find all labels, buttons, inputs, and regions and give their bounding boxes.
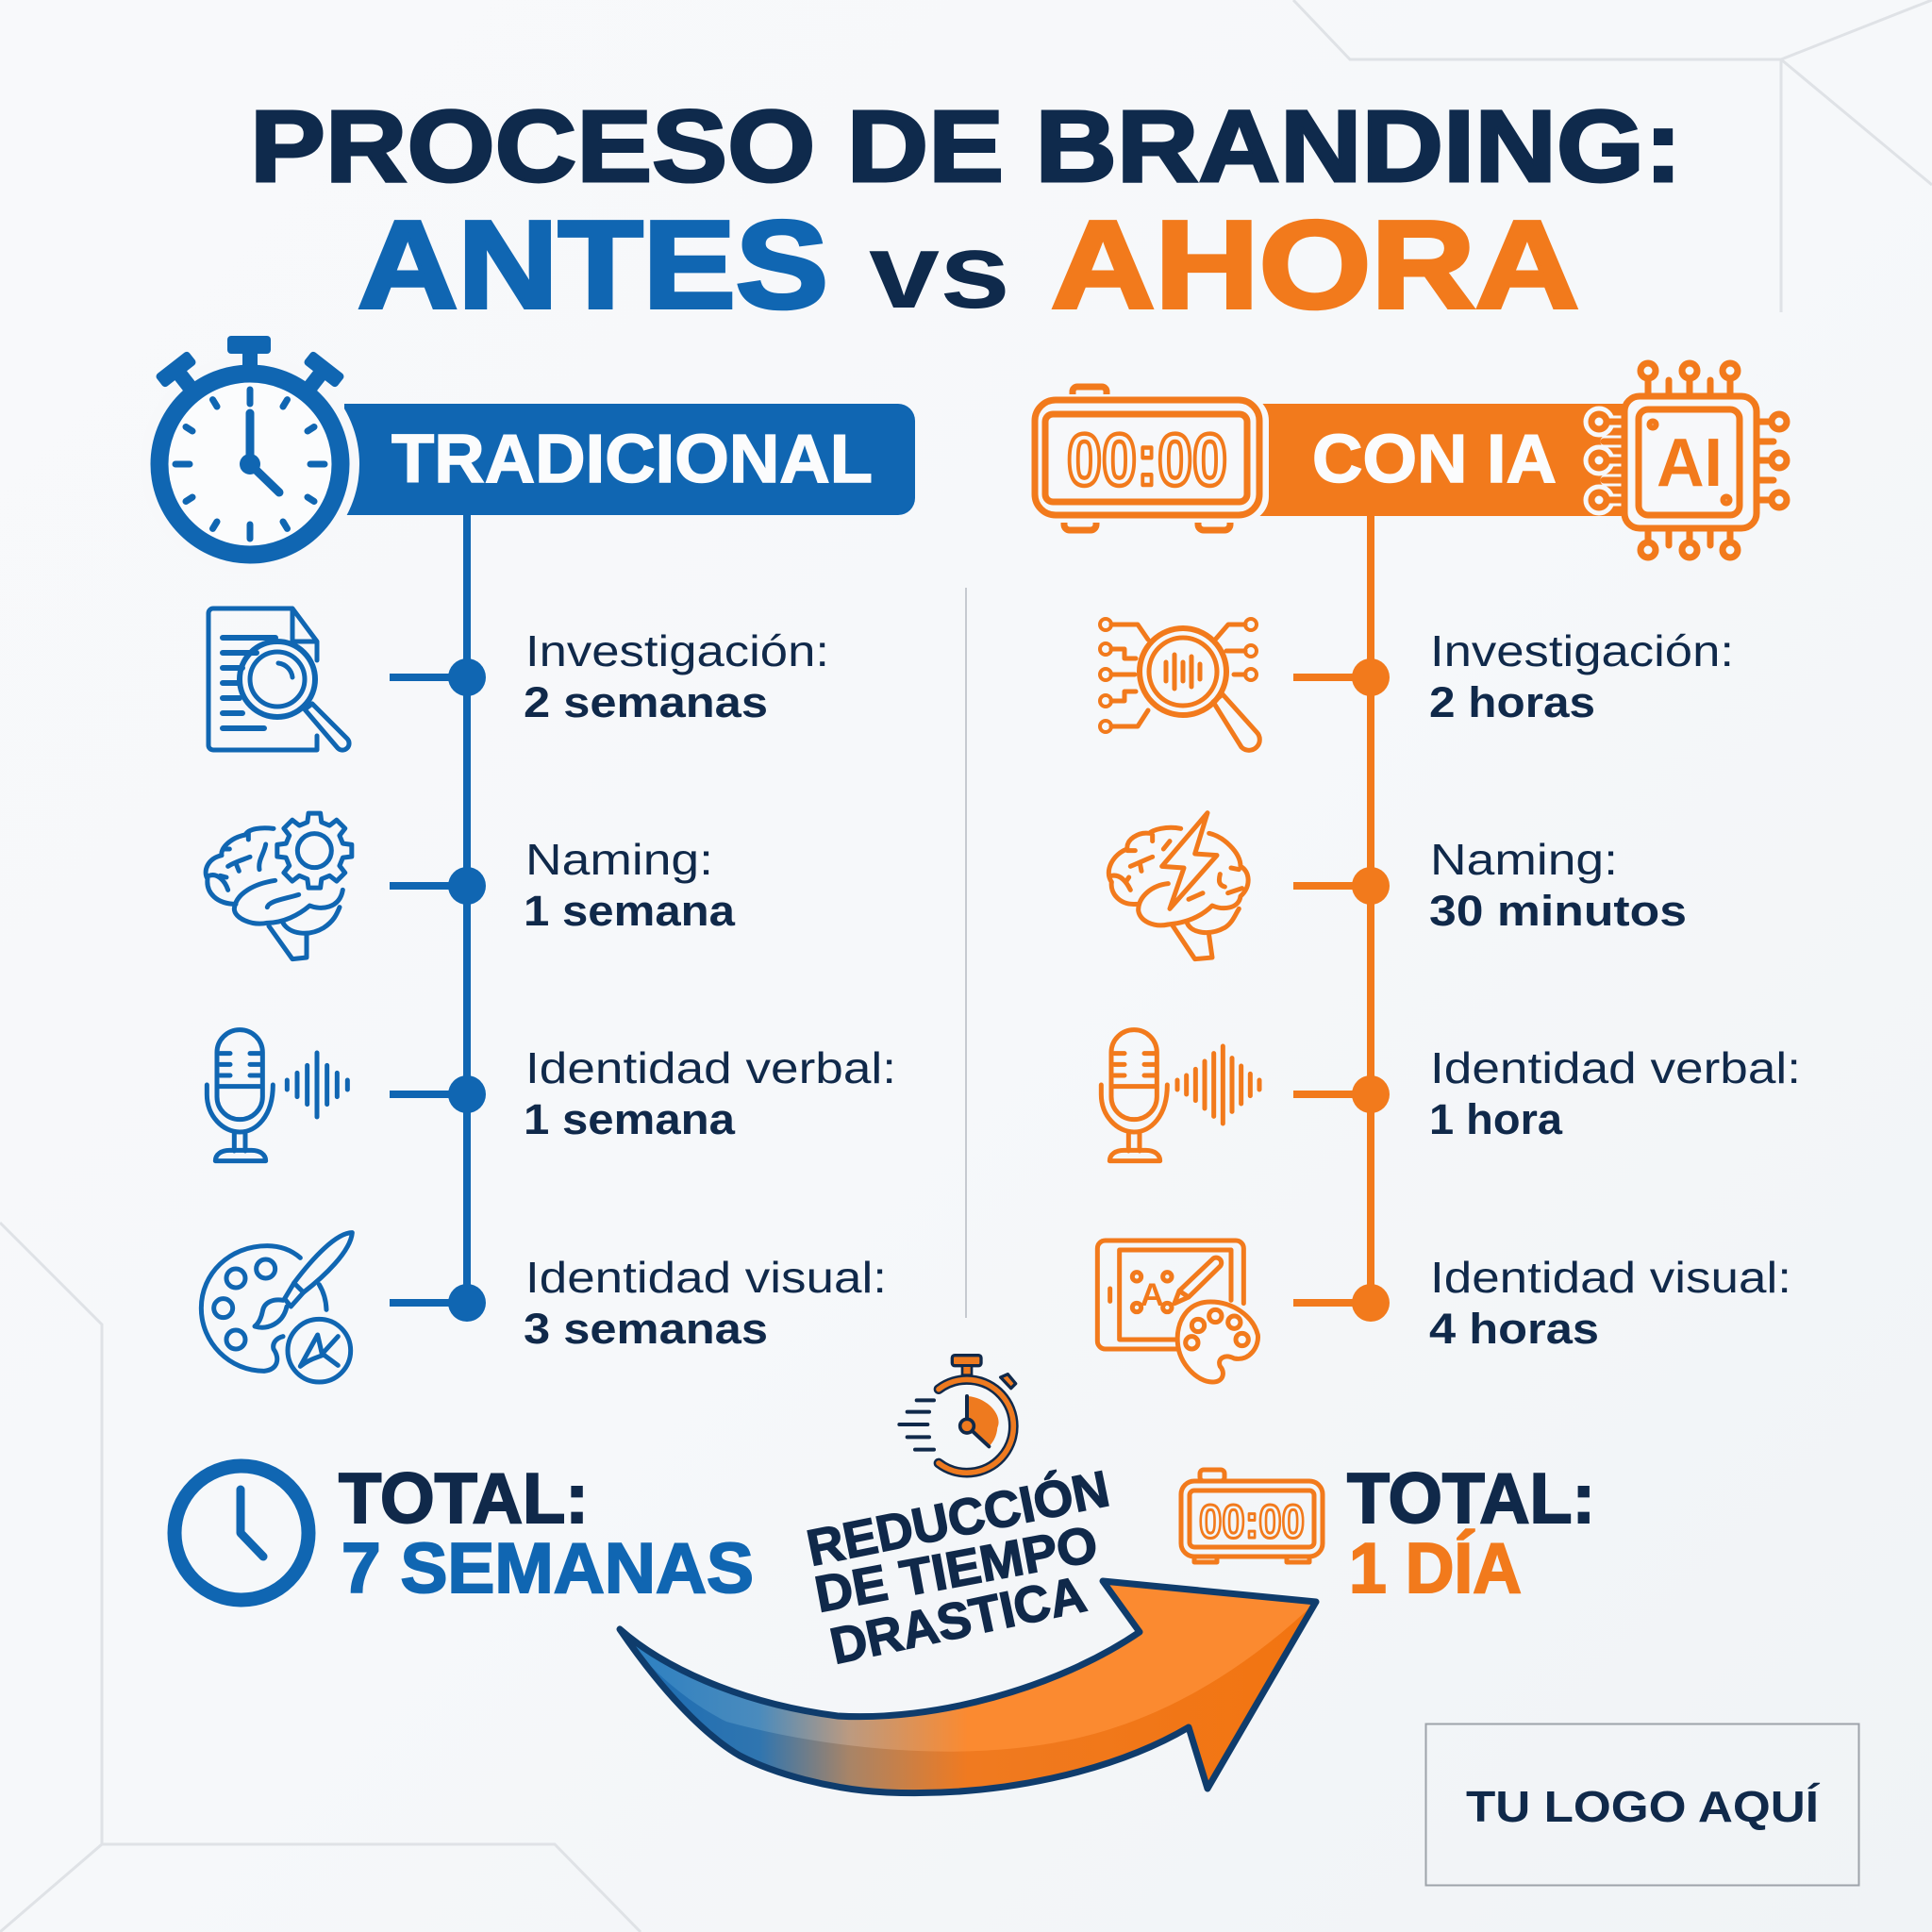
step: identidad visual: 3 semanas <box>524 1305 768 1353</box>
logo placeholder <box>1426 1724 1858 1885</box>
step: naming IA: 30 minutos <box>1429 887 1687 935</box>
step: identidad verbal IA <box>1429 1043 1801 1143</box>
header bar: con IA: CON IA <box>1312 422 1557 497</box>
reduction label <box>802 1460 1114 1675</box>
icon: digital clock <box>1035 387 1263 530</box>
step: naming <box>524 835 736 935</box>
icon: AI chip <box>1587 363 1787 558</box>
icon: small digital clock <box>1181 1470 1323 1562</box>
icon: microphone with sound wave <box>207 1030 347 1161</box>
step: identidad verbal IA: Identidad verbal: <box>1430 1043 1801 1092</box>
step: investigación <box>524 626 829 726</box>
reduction label: REDUCCIÓN <box>802 1460 1114 1577</box>
title: PROCESO DE BRANDING: <box>250 89 1682 203</box>
step: investigación IA <box>1429 626 1734 726</box>
step: naming: 1 semana <box>524 887 736 935</box>
step: identidad visual IA: 4 horas <box>1429 1305 1599 1353</box>
icon: brain with gear <box>206 813 352 959</box>
total: con IA: 1 DÍA <box>1349 1528 1522 1607</box>
reduction label: DRASTICA <box>825 1566 1091 1675</box>
step: identidad visual: Identidad visual: <box>525 1253 887 1302</box>
panel: con IA <box>1035 363 1801 1382</box>
logo placeholder: TU LOGO AQUÍ <box>1466 1782 1820 1831</box>
header bar: con IA <box>1259 404 1623 516</box>
title: ANTES <box>358 195 828 334</box>
icon: clock <box>175 1466 308 1600</box>
step: identidad visual IA: Identidad visual: <box>1430 1253 1791 1302</box>
step: identidad visual <box>524 1253 887 1353</box>
icon: AI chip: AI <box>1657 425 1723 501</box>
reduction label: DE TIEMPO <box>810 1516 1102 1624</box>
step: naming IA <box>1429 835 1687 935</box>
step: investigación IA: Investigación: <box>1430 626 1734 675</box>
icon: fast stopwatch <box>899 1356 1016 1473</box>
icon: tablet and palette <box>1097 1241 1258 1382</box>
icon: small digital clock: 00:00 <box>1199 1495 1305 1548</box>
icon: palette and brush <box>201 1233 352 1382</box>
step: investigación: 2 semanas <box>524 678 768 726</box>
total: tradicional <box>175 1458 754 1607</box>
header bar: tradicional <box>344 404 915 515</box>
timeline: tradicional <box>390 515 486 1322</box>
title: AHORA <box>1051 195 1579 334</box>
step: identidad verbal: Identidad verbal: <box>525 1043 896 1092</box>
icon: microphone with wave <box>1101 1030 1259 1161</box>
icon: tablet and palette: A <box>1141 1277 1164 1313</box>
step: identidad verbal: 1 semana <box>524 1095 736 1143</box>
total: tradicional: TOTAL: <box>339 1458 589 1538</box>
header bar: tradicional: TRADICIONAL <box>391 422 873 497</box>
icon: stopwatch <box>141 336 359 574</box>
step: naming: Naming: <box>525 835 713 884</box>
panel: tradicional <box>141 336 915 1382</box>
title <box>250 89 1682 334</box>
icon: data magnifier <box>1100 619 1259 750</box>
step: identidad verbal IA: 1 hora <box>1429 1095 1563 1143</box>
step: investigación: Investigación: <box>525 626 829 675</box>
icon: brain with lightning <box>1108 813 1248 959</box>
total: con IA <box>1181 1458 1595 1607</box>
total: con IA: TOTAL: <box>1347 1458 1595 1538</box>
step: naming IA: Naming: <box>1430 835 1618 884</box>
title: vs <box>869 211 1010 330</box>
total: tradicional: 7 SEMANAS <box>341 1528 754 1607</box>
icon: digital clock: 00:00 <box>1067 418 1227 501</box>
step: identidad verbal <box>524 1043 896 1143</box>
timeline: con IA <box>1293 516 1390 1322</box>
step: identidad visual IA <box>1429 1253 1791 1353</box>
step: investigación IA: 2 horas <box>1429 678 1595 726</box>
icon: document with magnifier <box>208 608 349 750</box>
arrow: blue to orange <box>620 1581 1316 1793</box>
